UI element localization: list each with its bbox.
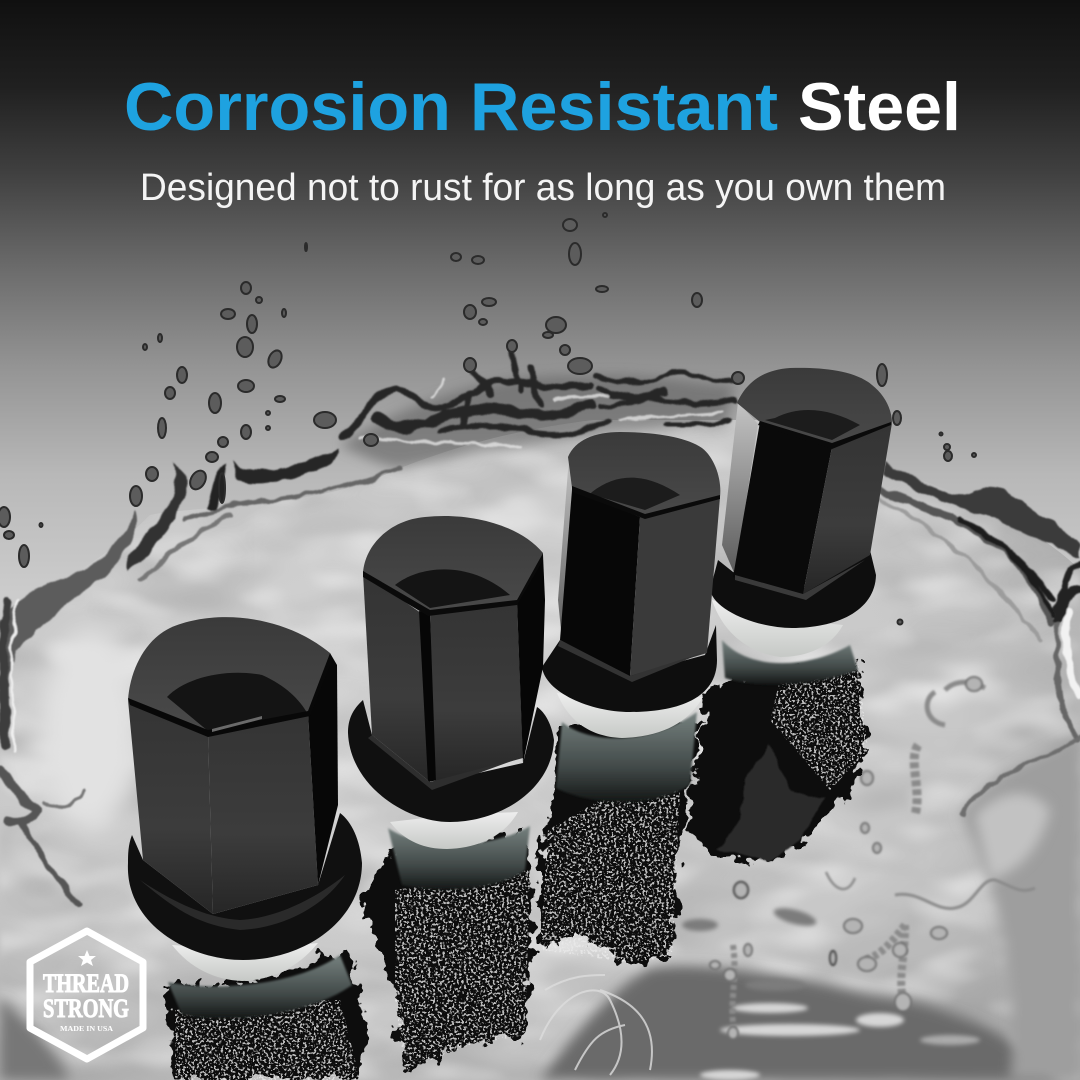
cone bbox=[712, 600, 843, 657]
cap highlight bbox=[212, 716, 262, 732]
underwater reflections of the nuts bbox=[165, 640, 868, 1080]
reflection: nut 2 bbox=[362, 830, 534, 1070]
left bottom silver rim bbox=[2, 600, 85, 905]
left face bbox=[128, 700, 213, 914]
cone bbox=[172, 943, 318, 981]
light area left bbox=[40, 630, 140, 830]
water droplets bbox=[0, 213, 976, 624]
water splash rim bbox=[0, 350, 1080, 905]
rim shadow band bbox=[340, 375, 735, 468]
darker smudges in mid water bbox=[682, 905, 818, 991]
cap bbox=[737, 368, 892, 447]
left arm streaks bbox=[127, 462, 188, 572]
dark lobes, lower right of nut 4 reflection bbox=[715, 745, 825, 860]
cap facet bbox=[765, 410, 860, 440]
reflection: nut 1 bbox=[165, 950, 365, 1080]
nut 3 bbox=[542, 432, 720, 738]
water pool bbox=[0, 420, 1080, 1080]
shadowed water, lower right bbox=[540, 966, 1060, 1080]
flange edge highlight bbox=[735, 560, 865, 600]
threaded stud: nut 4 bbox=[722, 640, 858, 685]
logo star bbox=[78, 950, 96, 966]
nut 2 bbox=[348, 516, 554, 849]
silver side face bbox=[558, 457, 572, 640]
dark face bbox=[560, 490, 640, 676]
nut 4 (back right) bbox=[710, 368, 892, 657]
lit face bbox=[630, 497, 720, 676]
swirl near bottom centre bbox=[540, 975, 652, 1075]
flange bbox=[542, 625, 717, 712]
cap facet bbox=[395, 569, 510, 608]
silver side face bbox=[722, 402, 758, 575]
cone bbox=[557, 693, 703, 738]
speckled sparkle over reflections bbox=[175, 660, 868, 1080]
right bright ridge bbox=[963, 738, 1080, 815]
flange edge highlight bbox=[558, 640, 705, 682]
cap facet bbox=[590, 478, 680, 510]
flange edge highlight bbox=[368, 735, 520, 790]
dark right face bbox=[308, 653, 338, 885]
title: Corrosion Resistant bbox=[124, 69, 778, 145]
logo wordmark: STRONG bbox=[43, 994, 129, 1023]
flange bbox=[348, 700, 554, 822]
cap facet bbox=[167, 673, 307, 731]
black rib bbox=[419, 611, 438, 782]
flange bbox=[128, 813, 362, 960]
lit face bbox=[803, 423, 892, 594]
threaded stud: nut 1 bbox=[168, 955, 352, 1019]
left face bbox=[363, 573, 430, 782]
bottom right droplet trails bbox=[732, 682, 1035, 1035]
logo wordmark: THREAD bbox=[43, 969, 129, 998]
cone bbox=[390, 812, 518, 849]
threaded stud: nut 3 bbox=[556, 712, 697, 802]
left crescent streak bbox=[232, 447, 338, 483]
right rim streaks bbox=[885, 460, 1080, 558]
cap bbox=[568, 432, 720, 517]
bright streaks on shadowed water bbox=[700, 1003, 980, 1080]
droplets lower right bbox=[710, 677, 982, 1039]
title: Steel: Steel bbox=[798, 69, 961, 145]
logo wordmark: MADE IN USA bbox=[60, 1025, 113, 1033]
subtitle: Designed not to rust for as long as you own them bbox=[140, 167, 946, 209]
cap bbox=[363, 516, 543, 613]
top waves bbox=[342, 350, 740, 437]
logo: Thread Strong hexagon badge bbox=[30, 931, 143, 1059]
reflection: nut 4 bbox=[688, 660, 868, 862]
front face bbox=[208, 713, 318, 914]
nut 1 (front left) bbox=[128, 617, 362, 981]
dark face bbox=[733, 422, 832, 594]
right shaded water body bbox=[960, 735, 1080, 1080]
threaded stud: nut 2 bbox=[388, 826, 530, 890]
cap bbox=[128, 617, 330, 733]
flange bbox=[710, 550, 876, 628]
dark right face bbox=[517, 555, 545, 763]
logo wordmark bbox=[43, 969, 129, 1033]
reflection: nut 3 bbox=[540, 720, 700, 962]
lower-left shade bbox=[0, 1000, 70, 1080]
front face bbox=[430, 603, 523, 782]
